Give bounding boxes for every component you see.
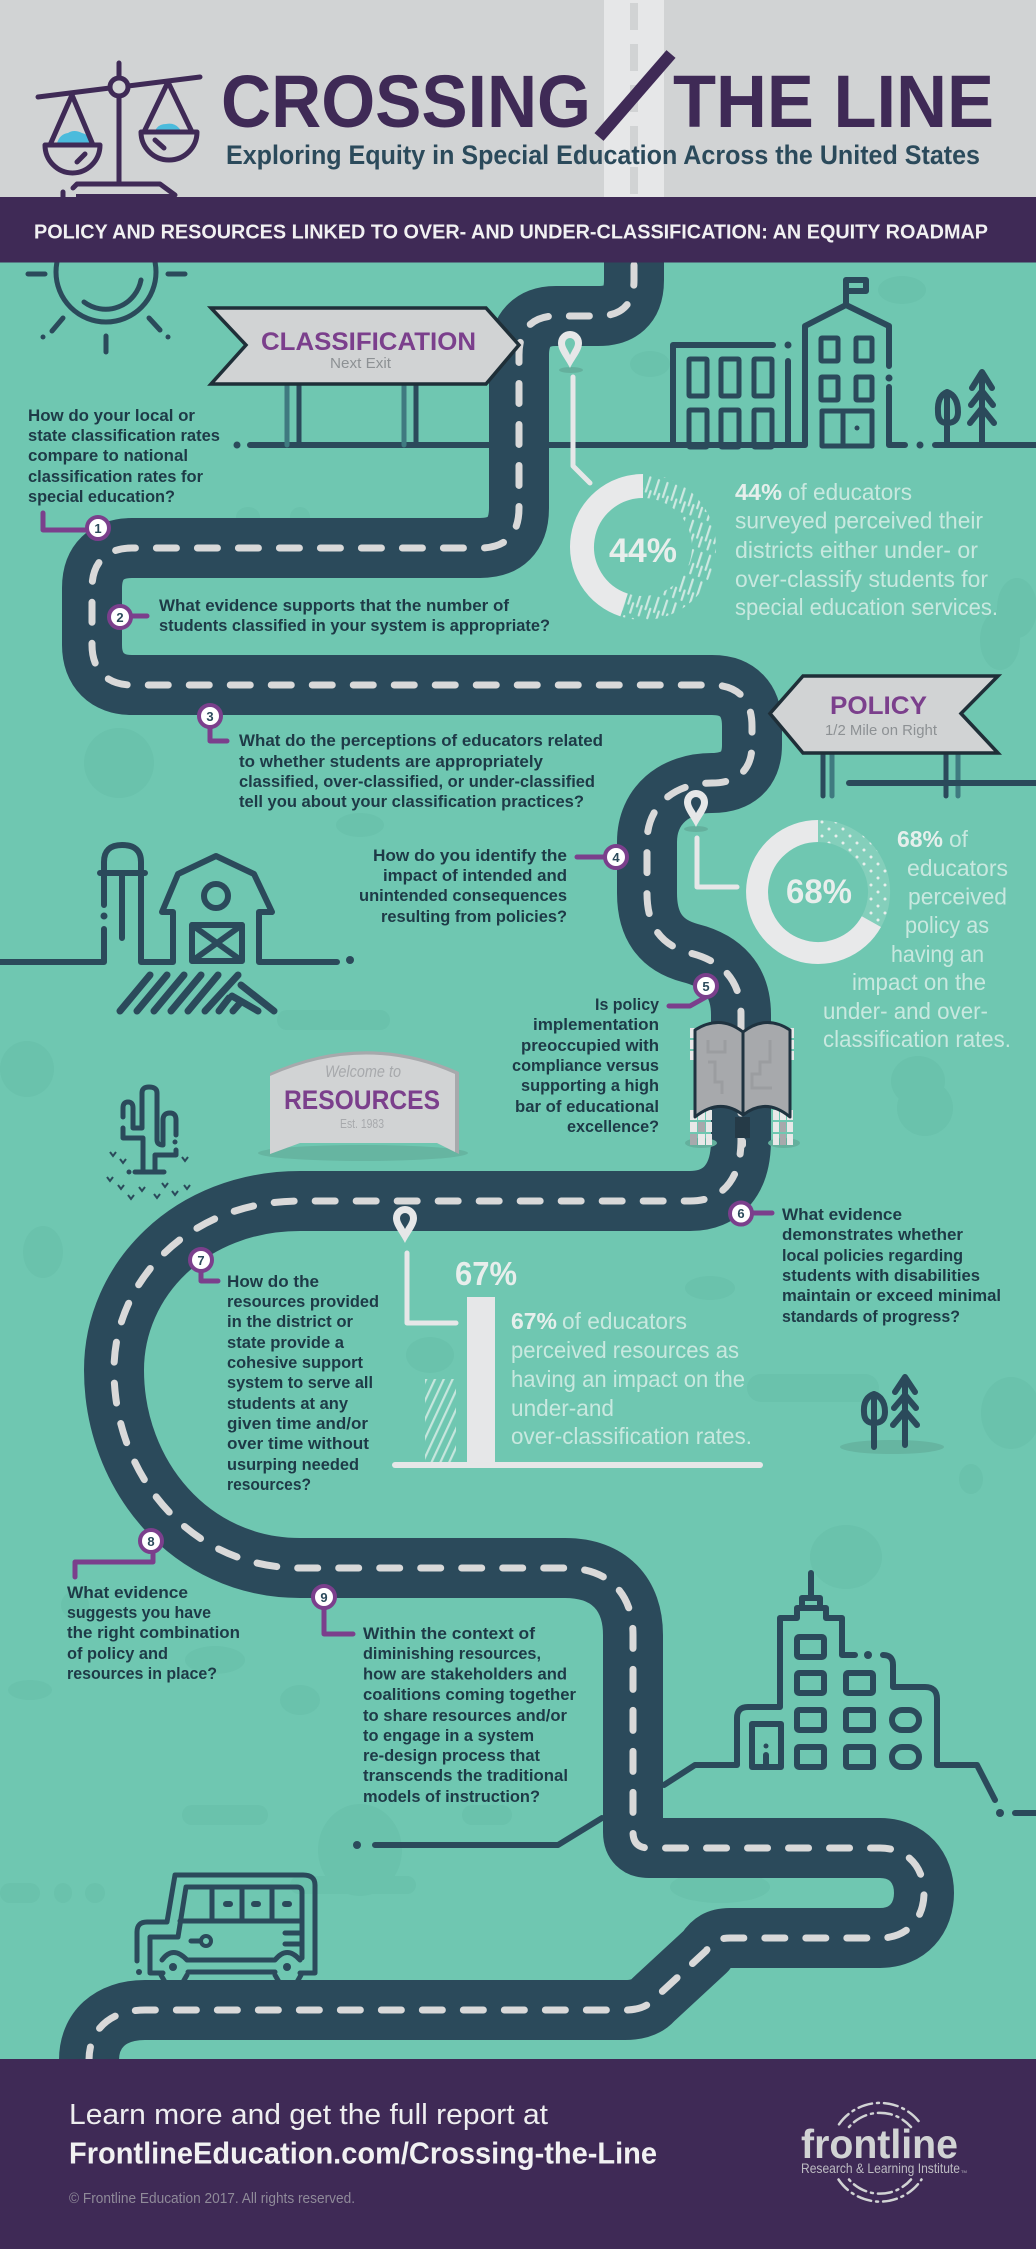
stat text: 67% of educators: 67% bbox=[511, 1308, 557, 1334]
stat text: 68% of educators: impact on the bbox=[852, 969, 986, 995]
footer bbox=[0, 2059, 1036, 2249]
question 5: preoccupied with bbox=[521, 1037, 659, 1055]
question 4: impact of intended and bbox=[383, 867, 567, 885]
question 6: local policies regarding bbox=[782, 1247, 963, 1265]
sign: welcome to resources bbox=[258, 1051, 468, 1161]
question 7: in the district or bbox=[227, 1313, 354, 1331]
title bbox=[221, 54, 994, 143]
question 1: state classification rates bbox=[28, 427, 220, 445]
question 5: 5 bbox=[702, 979, 710, 994]
leader: pin to 67% bar chart bbox=[407, 1253, 456, 1323]
question 1: classification rates for bbox=[28, 468, 204, 486]
question 6: What evidence bbox=[782, 1206, 902, 1224]
stat text: 68% of educators: educators bbox=[907, 855, 1008, 881]
question 8: What evidence bbox=[67, 1584, 188, 1602]
question 5: supporting a high bbox=[521, 1077, 659, 1095]
stat text: 44% of educators: districts either under- or bbox=[735, 537, 978, 563]
chart: 67% bar: 67% bbox=[455, 1255, 517, 1292]
icon: scales of justice bbox=[38, 63, 200, 198]
sign: classification: Next Exit bbox=[330, 356, 391, 372]
question 3: tell you about your classification practices? bbox=[239, 793, 584, 811]
stat text: 44% of educators: of educators bbox=[788, 479, 912, 505]
question 2 bbox=[109, 597, 550, 635]
icon: cactus bbox=[107, 1087, 190, 1199]
question 4: How do you identify the bbox=[373, 847, 567, 865]
stat text: 68% of educators: perceived bbox=[908, 884, 1007, 910]
subtitle: Exploring Equity in Special Education Across the United States bbox=[226, 140, 980, 170]
question 7: state provide a bbox=[227, 1334, 345, 1352]
question 7: given time and/or bbox=[227, 1415, 369, 1433]
question 8 bbox=[67, 1530, 240, 1683]
question 3: to whether students are appropriately bbox=[239, 753, 544, 771]
question 5: bar of educational bbox=[515, 1098, 659, 1116]
pin: resources stat bbox=[393, 1206, 417, 1243]
question 2: What evidence supports that the number of bbox=[159, 597, 510, 615]
icon: book over road bbox=[685, 1022, 800, 1148]
question 9: models of instruction? bbox=[363, 1788, 540, 1806]
question 3: 3 bbox=[206, 709, 214, 724]
leader: pin to 44% donut bbox=[573, 377, 590, 483]
sign: policy bbox=[770, 676, 1036, 796]
question 9: re-design process that bbox=[363, 1747, 541, 1765]
title: THE LINE bbox=[673, 60, 994, 143]
footer url: FrontlineEducation.com/Crossing-the-Line bbox=[69, 2136, 657, 2170]
question 7: resources? bbox=[227, 1476, 311, 1494]
sign: welcome to resources: RESOURCES bbox=[284, 1085, 440, 1115]
question 8: 8 bbox=[147, 1534, 155, 1549]
stat text: 68% of educators: under- and over- bbox=[823, 998, 988, 1024]
question 3: classified, over-classified, or under-classified bbox=[239, 773, 595, 791]
chart: 67% bar bbox=[392, 1255, 763, 1468]
question 3 bbox=[199, 705, 603, 811]
title: CROSSING bbox=[221, 60, 591, 143]
stat text: 68% of educators bbox=[823, 826, 1011, 1052]
question 1: 1 bbox=[94, 521, 102, 536]
question 5 bbox=[512, 975, 717, 1136]
question 4: unintended consequences bbox=[359, 887, 567, 905]
stat text: 44% of educators bbox=[735, 479, 998, 620]
question 7: students at any bbox=[227, 1395, 349, 1413]
question 6: standards of progress? bbox=[782, 1308, 960, 1326]
question 1: How do your local or bbox=[28, 407, 196, 425]
question 7: How do the bbox=[227, 1273, 319, 1291]
question 5: compliance versus bbox=[512, 1057, 659, 1075]
stat text: 68% of educators: of bbox=[949, 826, 969, 852]
question 7: over time without bbox=[227, 1435, 370, 1453]
stat text: 68% of educators: policy as bbox=[905, 912, 989, 938]
banner bbox=[0, 197, 1036, 262]
footer call to action: Learn more and get the full report at bbox=[69, 2099, 548, 2131]
question 6: maintain or exceed minimal bbox=[782, 1287, 1001, 1305]
question 5: Is policy bbox=[595, 996, 660, 1014]
question 2: students classified in your system is appropriate? bbox=[159, 617, 550, 635]
header background bbox=[0, 0, 1036, 197]
chart: 44% donut: 44% bbox=[609, 532, 677, 570]
question 1 bbox=[28, 407, 220, 539]
question 9: Within the context of bbox=[363, 1625, 536, 1643]
question 9: to engage in a system bbox=[363, 1727, 534, 1745]
question 9 bbox=[313, 1586, 577, 1806]
icon: school bus bbox=[136, 1875, 315, 1982]
copyright: © Frontline Education 2017. All rights reserved. bbox=[69, 2191, 355, 2207]
question 8: of policy and bbox=[67, 1645, 168, 1663]
ground line and school scene bbox=[234, 280, 1036, 448]
stat text: 67% of educators: having an impact on the bbox=[511, 1366, 745, 1392]
icon: city skyline bbox=[353, 1573, 1036, 1849]
pin: policy stat bbox=[684, 790, 708, 832]
question 9: diminishing resources, bbox=[363, 1645, 541, 1663]
sign: welcome to resources: Est. 1983 bbox=[340, 1117, 384, 1131]
question 4: resulting from policies? bbox=[381, 908, 567, 926]
question 8: the right combination bbox=[67, 1624, 240, 1642]
sign: classification bbox=[211, 308, 519, 445]
leader: pin to 68% donut bbox=[697, 838, 737, 887]
stat text: 67% of educators bbox=[511, 1308, 752, 1449]
pin: classification stat bbox=[558, 331, 583, 373]
icon: farm with silo and barn bbox=[0, 845, 354, 1011]
question 9: transcends the traditional bbox=[363, 1767, 568, 1785]
stat text: 68% of educators: having an bbox=[891, 941, 984, 967]
sign: policy: POLICY bbox=[830, 692, 927, 720]
question 9: to share resources and/or bbox=[363, 1707, 568, 1725]
icon: trees bbox=[840, 1377, 944, 1454]
question 6 bbox=[730, 1202, 1001, 1326]
stat text: 67% of educators: of educators bbox=[562, 1308, 687, 1334]
question 1: special education? bbox=[28, 488, 175, 506]
chart: 68% donut: 68% bbox=[786, 873, 852, 911]
question 1: compare to national bbox=[28, 447, 188, 465]
icon: sun bbox=[28, 222, 185, 352]
question 6: demonstrates whether bbox=[782, 1226, 964, 1244]
question 7: resources provided bbox=[227, 1293, 379, 1311]
stat text: 44% of educators: over-classify students for bbox=[735, 566, 988, 592]
question 8: suggests you have bbox=[67, 1604, 211, 1622]
question 9: 9 bbox=[320, 1590, 328, 1605]
icon: trees by school bbox=[938, 372, 994, 445]
question 7: system to serve all bbox=[227, 1374, 373, 1392]
question 4: 4 bbox=[612, 850, 620, 865]
question 5: excellence? bbox=[567, 1118, 659, 1136]
stat text: 44% of educators: surveyed perceived their bbox=[735, 508, 983, 534]
banner: POLICY AND RESOURCES LINKED TO OVER- AND UNDER-CLASSIFICATION: AN EQUITY ROADMAP bbox=[34, 222, 988, 244]
question 3: What do the perceptions of educators related bbox=[239, 732, 603, 750]
sign: policy: 1/2 Mile on Right bbox=[825, 723, 937, 739]
sign: welcome to resources: Welcome to bbox=[325, 1062, 401, 1081]
stat text: 67% of educators: perceived resources as bbox=[511, 1337, 739, 1363]
logo: frontline: frontline bbox=[801, 2121, 958, 2167]
chart: 44% donut bbox=[582, 486, 704, 608]
road bbox=[89, 255, 924, 2070]
question 7: cohesive support bbox=[227, 1354, 363, 1372]
chart: 68% donut bbox=[757, 831, 879, 953]
logo: frontline bbox=[801, 2103, 967, 2202]
stat text: 68% of educators: 68% bbox=[897, 826, 943, 852]
logo: frontline: Research & Learning Institute bbox=[801, 2160, 960, 2176]
question 2: 2 bbox=[116, 610, 124, 625]
question 7 bbox=[190, 1249, 379, 1494]
stat text: 44% of educators: special education services. bbox=[735, 594, 998, 620]
stat text: 67% of educators: over-classification rates. bbox=[511, 1423, 752, 1449]
stat text: 67% of educators: under-and bbox=[511, 1395, 614, 1421]
question 9: how are stakeholders and bbox=[363, 1666, 567, 1684]
question 6: students with disabilities bbox=[782, 1267, 980, 1285]
stat text: 68% of educators: classification rates. bbox=[823, 1026, 1011, 1052]
sign: classification: CLASSIFICATION bbox=[261, 328, 476, 356]
question 4 bbox=[359, 846, 627, 926]
question 8: resources in place? bbox=[67, 1665, 217, 1683]
question 9: coalitions coming together bbox=[363, 1686, 577, 1704]
question 7: 7 bbox=[197, 1253, 205, 1268]
stat text: 44% of educators: 44% bbox=[735, 479, 782, 505]
question 5: implementation bbox=[533, 1016, 659, 1034]
question 6: 6 bbox=[737, 1206, 745, 1221]
question 7: usurping needed bbox=[227, 1456, 359, 1474]
logo: frontline: TM bbox=[961, 2169, 967, 2174]
